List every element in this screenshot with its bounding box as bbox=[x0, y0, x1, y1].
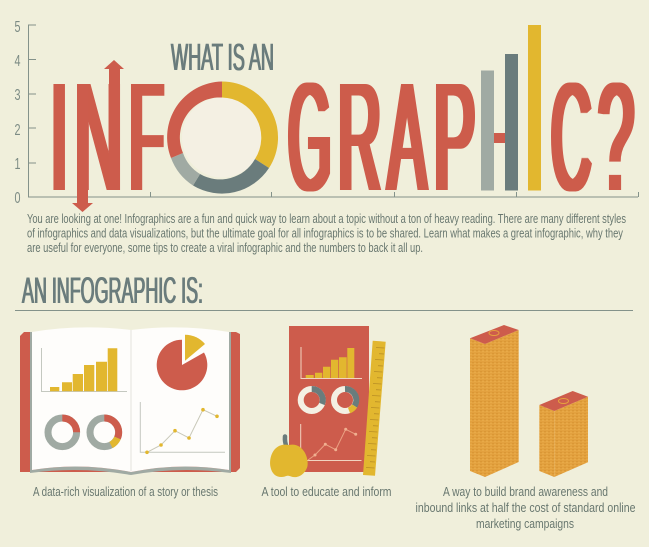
caption: report: A tool to educate and inform bbox=[262, 484, 392, 499]
ruler bbox=[363, 341, 386, 476]
axis labels bbox=[14, 19, 21, 207]
caption: money: marketing campaigns bbox=[476, 516, 574, 531]
divider bbox=[15, 310, 633, 311]
axis labels: 2 bbox=[14, 122, 21, 139]
title letters: R bbox=[338, 51, 381, 223]
small stack bbox=[539, 391, 588, 477]
red report page bbox=[289, 326, 369, 472]
donut letter O bbox=[167, 81, 278, 194]
axis labels: 4 bbox=[14, 53, 21, 70]
title letters: A bbox=[388, 51, 426, 223]
caption: money bbox=[416, 484, 636, 531]
axis labels: 0 bbox=[14, 190, 21, 207]
bar letters H and I bbox=[481, 25, 541, 190]
intro paragraph: are useful for everyone, some tips to create a viral infographic and the numbers to back it all up. bbox=[27, 241, 423, 255]
chart axes bbox=[14, 19, 638, 207]
report line chart bbox=[301, 424, 362, 460]
arrow: down bbox=[72, 84, 93, 212]
illustration: open book bbox=[20, 327, 240, 475]
title: infographic bbox=[51, 25, 634, 223]
axis labels: 1 bbox=[14, 156, 21, 173]
pie chart bbox=[157, 335, 207, 390]
illustration: money stacks bbox=[470, 325, 588, 477]
report donuts bbox=[301, 389, 356, 411]
axis labels: 5 bbox=[14, 19, 21, 36]
title letters: G bbox=[288, 51, 331, 223]
bar chart bbox=[42, 348, 127, 392]
report bar chart bbox=[301, 347, 362, 378]
line chart bbox=[140, 402, 225, 454]
text: WHAT IS AN bbox=[171, 37, 274, 79]
title letters: F bbox=[129, 51, 164, 223]
donut charts bbox=[48, 418, 119, 447]
title letters: P bbox=[434, 51, 475, 223]
apple bbox=[270, 436, 308, 477]
arrow: up bbox=[104, 60, 124, 190]
illustration: report with ruler and apple bbox=[270, 326, 386, 477]
title letters: N bbox=[75, 51, 122, 223]
text: AN INFOGRAPHIC IS: bbox=[22, 270, 203, 311]
title letters: I bbox=[51, 51, 67, 223]
large stack bbox=[470, 325, 519, 477]
axis labels: 3 bbox=[14, 87, 21, 104]
title letters bbox=[51, 51, 634, 223]
intro paragraph bbox=[27, 212, 626, 255]
caption: book: A data-rich visualization of a story or thesis bbox=[33, 484, 218, 499]
caption: money: A way to build brand awareness and bbox=[443, 484, 608, 499]
